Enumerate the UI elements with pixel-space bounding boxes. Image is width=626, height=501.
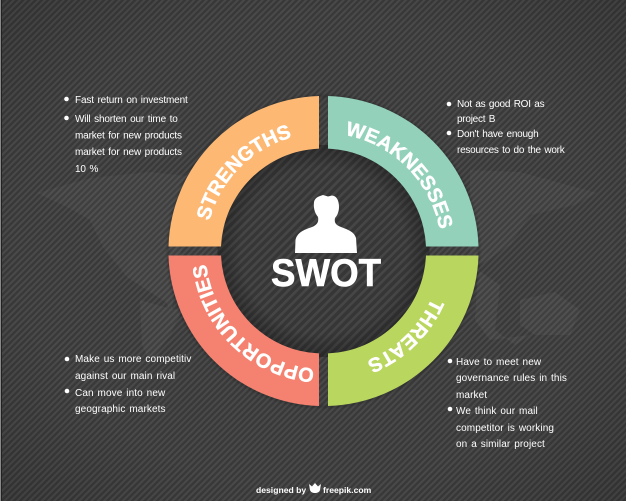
text block: threats: on a similar project — [456, 439, 545, 450]
text block: strengths: market for new products — [75, 147, 182, 158]
panel: strengths — [168, 96, 319, 246]
label: opportunities: OPPORTUNITIES — [193, 265, 314, 382]
text block: strengths: Will shorten our time to — [75, 114, 178, 125]
icon: person silhouette — [295, 195, 357, 253]
label: threats: THREATS — [368, 302, 444, 372]
text block: weaknesses: resources to do the work — [457, 145, 566, 156]
text block: opportunities: Make us more competitiv — [75, 354, 191, 365]
center circle — [218, 145, 430, 357]
ring shadow — [168, 96, 479, 407]
text block: threats: competitor is working — [456, 423, 554, 434]
text block: opportunities: against our main rival — [75, 371, 175, 382]
panel: weaknesses — [328, 96, 478, 246]
text block: weaknesses: project B — [457, 114, 496, 125]
text block: strengths: market for new products — [75, 130, 182, 142]
text block: strengths: 10 % — [75, 164, 98, 175]
label: weaknesses: WEAKNESSES — [348, 121, 452, 228]
text block: opportunities: geographic markets — [75, 404, 166, 415]
icon: freepik crown — [309, 483, 321, 493]
text block: weaknesses — [447, 99, 566, 156]
text block: strengths — [64, 95, 188, 175]
text block: weaknesses: Don't have enough — [457, 129, 538, 140]
panel: opportunities — [168, 256, 319, 406]
credit: designed by freepik.com: designed by — [256, 485, 306, 495]
label: strengths: STRENGTHS — [197, 125, 290, 220]
world map silhouette — [37, 170, 597, 362]
credit: designed by freepik.com — [256, 483, 372, 495]
text block: opportunities — [65, 354, 191, 415]
text block: opportunities: Can move into new — [75, 388, 166, 399]
text block: threats — [448, 357, 567, 450]
text block: threats: governance rules in this — [456, 373, 567, 384]
text block: threats: Have to meet new — [456, 357, 542, 368]
title: SWOT: SWOT — [271, 252, 381, 295]
text block: weaknesses: Not as good ROI as — [457, 99, 545, 110]
panel: threats — [328, 256, 478, 406]
text block: threats: We think our mail — [456, 406, 538, 417]
credit: designed by freepik.com: freepik.com — [323, 485, 372, 495]
text block: strengths: Fast return on investment — [75, 95, 188, 106]
text block: threats: market — [456, 390, 487, 401]
